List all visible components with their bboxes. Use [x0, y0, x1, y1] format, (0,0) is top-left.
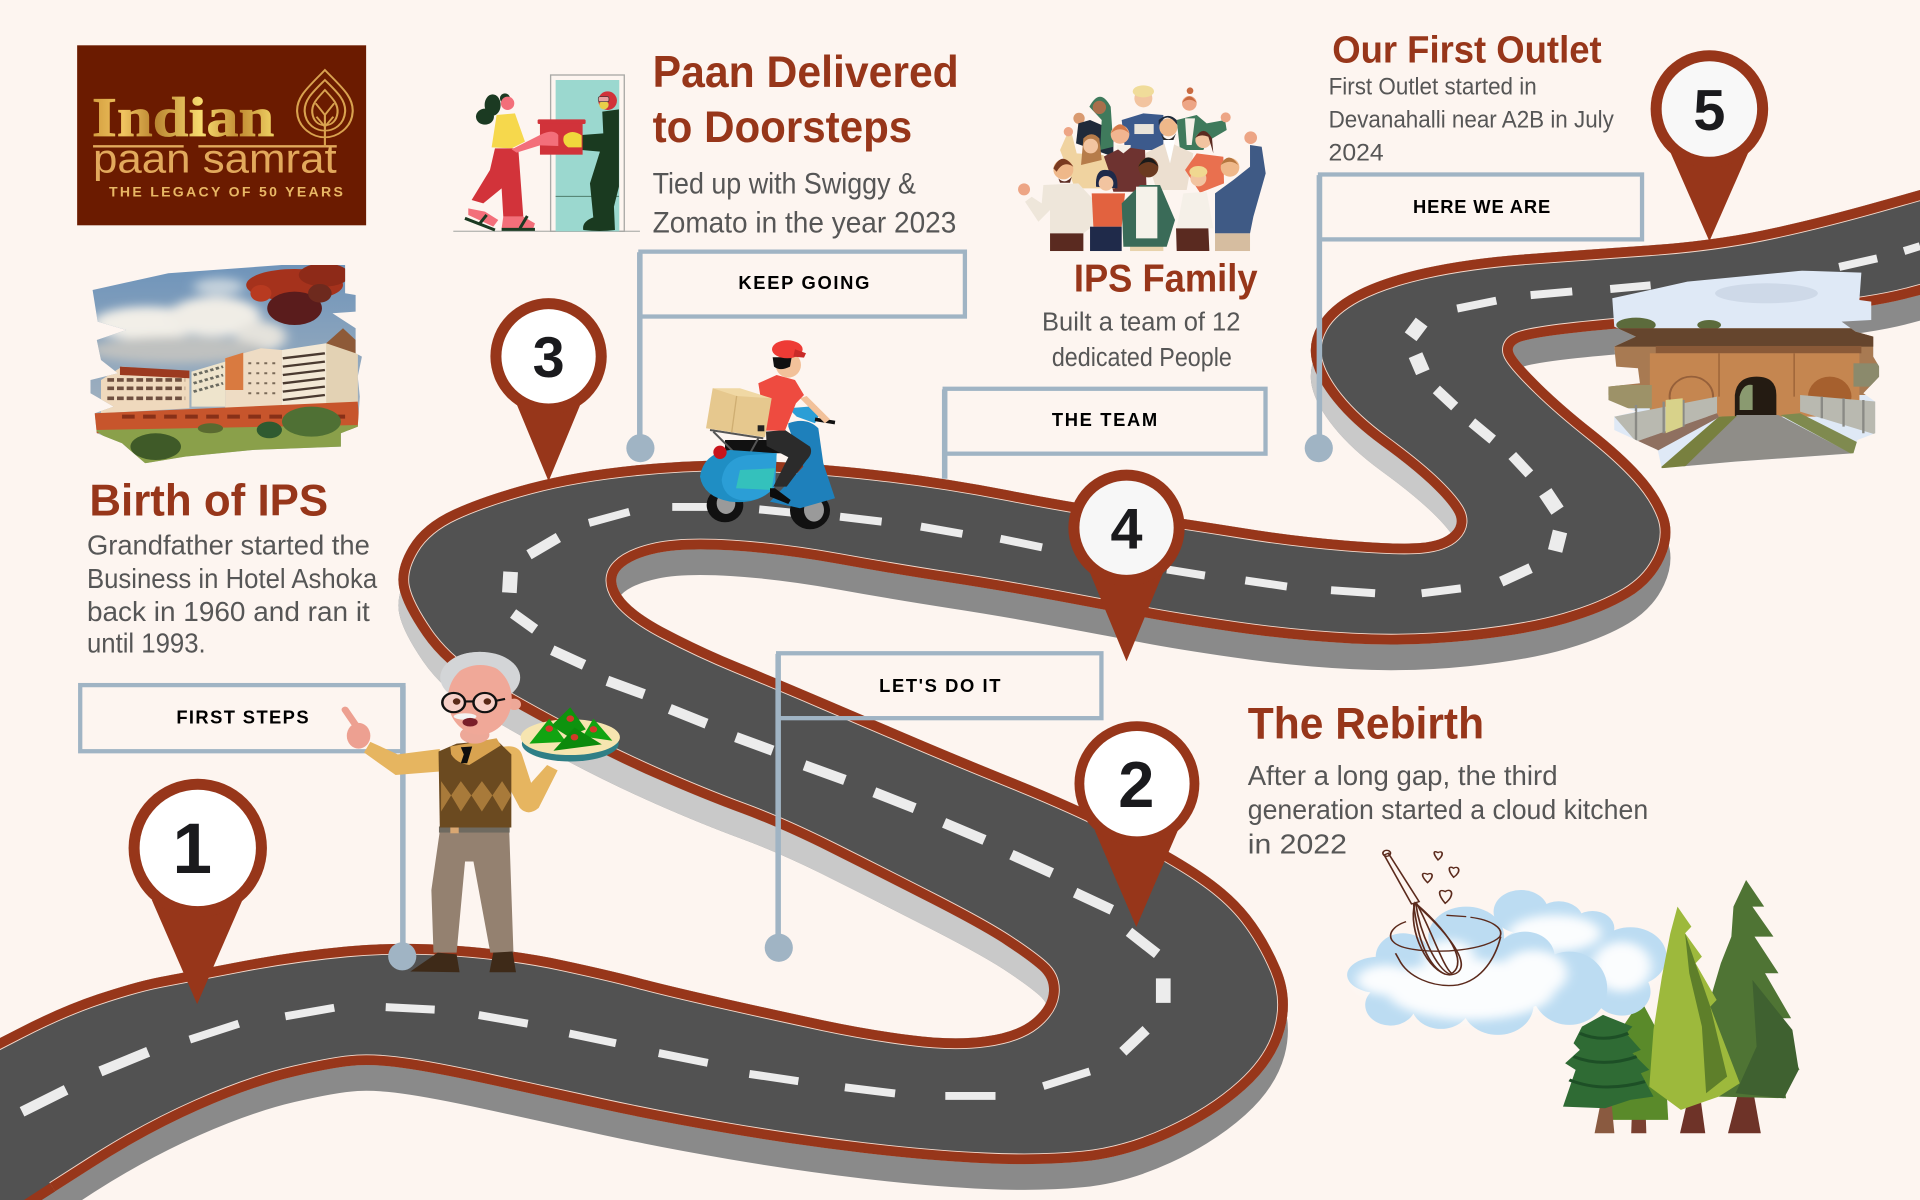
title: IPS Family: IPS Family [1074, 257, 1258, 300]
pin 3 [490, 298, 607, 481]
illustration: whisk and bowl [1383, 850, 1501, 986]
text: first outlet description: First Outlet started in [1329, 73, 1537, 100]
title: Paan Delivered to Doorsteps: Paan Delivered [653, 48, 959, 97]
text: IPS Family description: dedicated People [1052, 342, 1232, 372]
text: delivery description: Tied up with Swiggy & [653, 167, 916, 200]
text: delivery description: Zomato in the year 2023 [653, 207, 956, 240]
sign: here we are: HERE WE ARE [1413, 196, 1550, 217]
sign: first steps [80, 685, 416, 970]
text: rebirth description: in 2022 [1248, 828, 1347, 859]
pin 3: 3 [533, 326, 565, 390]
text: Birth of IPS description: back in 1960 and ran it [87, 596, 370, 627]
logo: Indian [92, 87, 274, 149]
sign: first steps: FIRST STEPS [176, 707, 309, 728]
logo [77, 45, 366, 225]
pin 4 [1068, 470, 1185, 661]
title: Birth of IPS: Birth of IPS [89, 477, 328, 526]
text: first outlet description: 2024 [1329, 139, 1384, 166]
pin 2 [1074, 721, 1199, 927]
text: delivery description [653, 167, 956, 240]
sign: let's do it: LET'S DO IT [879, 675, 1001, 696]
title: Paan Delivered to Doorsteps [653, 48, 959, 152]
pin 2: 2 [1118, 748, 1154, 821]
sign: the team [945, 389, 1266, 479]
sign: let's do it [765, 653, 1101, 962]
sign: keep going: KEEP GOING [738, 272, 869, 293]
text: first outlet description [1329, 73, 1615, 166]
pin 5: 5 [1693, 79, 1725, 143]
sign: here we are [1305, 174, 1642, 462]
title: Our First Outlet: Our First Outlet [1332, 29, 1602, 71]
road shadow [42, 295, 1920, 1200]
illustration: delivery handover [453, 75, 640, 231]
text: Birth of IPS description [87, 530, 377, 659]
pin 1: 1 [172, 810, 212, 889]
illustration: team group [1018, 85, 1266, 251]
title: The Rebirth: The Rebirth [1248, 699, 1484, 748]
photo: Hotel Ashoka [84, 260, 370, 467]
sign: the team: THE TEAM [1052, 409, 1157, 430]
text: Birth of IPS description: Grandfather started the [87, 530, 370, 561]
logo: THE LEGACY OF 50 YEARS [109, 184, 343, 200]
road centre dashes [22, 246, 1920, 1112]
text: IPS Family description: Built a team of 12 [1042, 307, 1240, 337]
illustration: front pine trees [1649, 880, 1800, 1133]
text: Birth of IPS description: Business in Hotel Ashoka [87, 563, 377, 594]
text: Birth of IPS description: until 1993. [87, 628, 206, 659]
logo: paan samrat [93, 136, 337, 182]
title: Paan Delivered to Doorsteps: to Doorsteps [653, 103, 912, 152]
illustration: back pine trees [1563, 1000, 1668, 1133]
pin 5 [1651, 50, 1768, 241]
sign: keep going [626, 252, 965, 462]
photo: Devanahalli gate [1604, 267, 1885, 473]
text: rebirth description: After a long gap, the third [1248, 760, 1558, 791]
text: first outlet description: Devanahalli near A2B in July [1329, 106, 1615, 133]
character: grandfather with paan plate [345, 652, 620, 972]
text: rebirth description [1248, 760, 1648, 859]
text: rebirth description: generation started a cloud kitchen [1248, 794, 1648, 825]
illustration: delivery rider on scooter [700, 340, 835, 529]
illustration: clouds [1347, 890, 1667, 1035]
text: IPS Family description [1042, 307, 1240, 372]
pin 1 [129, 779, 267, 1004]
pin 4: 4 [1111, 498, 1143, 562]
